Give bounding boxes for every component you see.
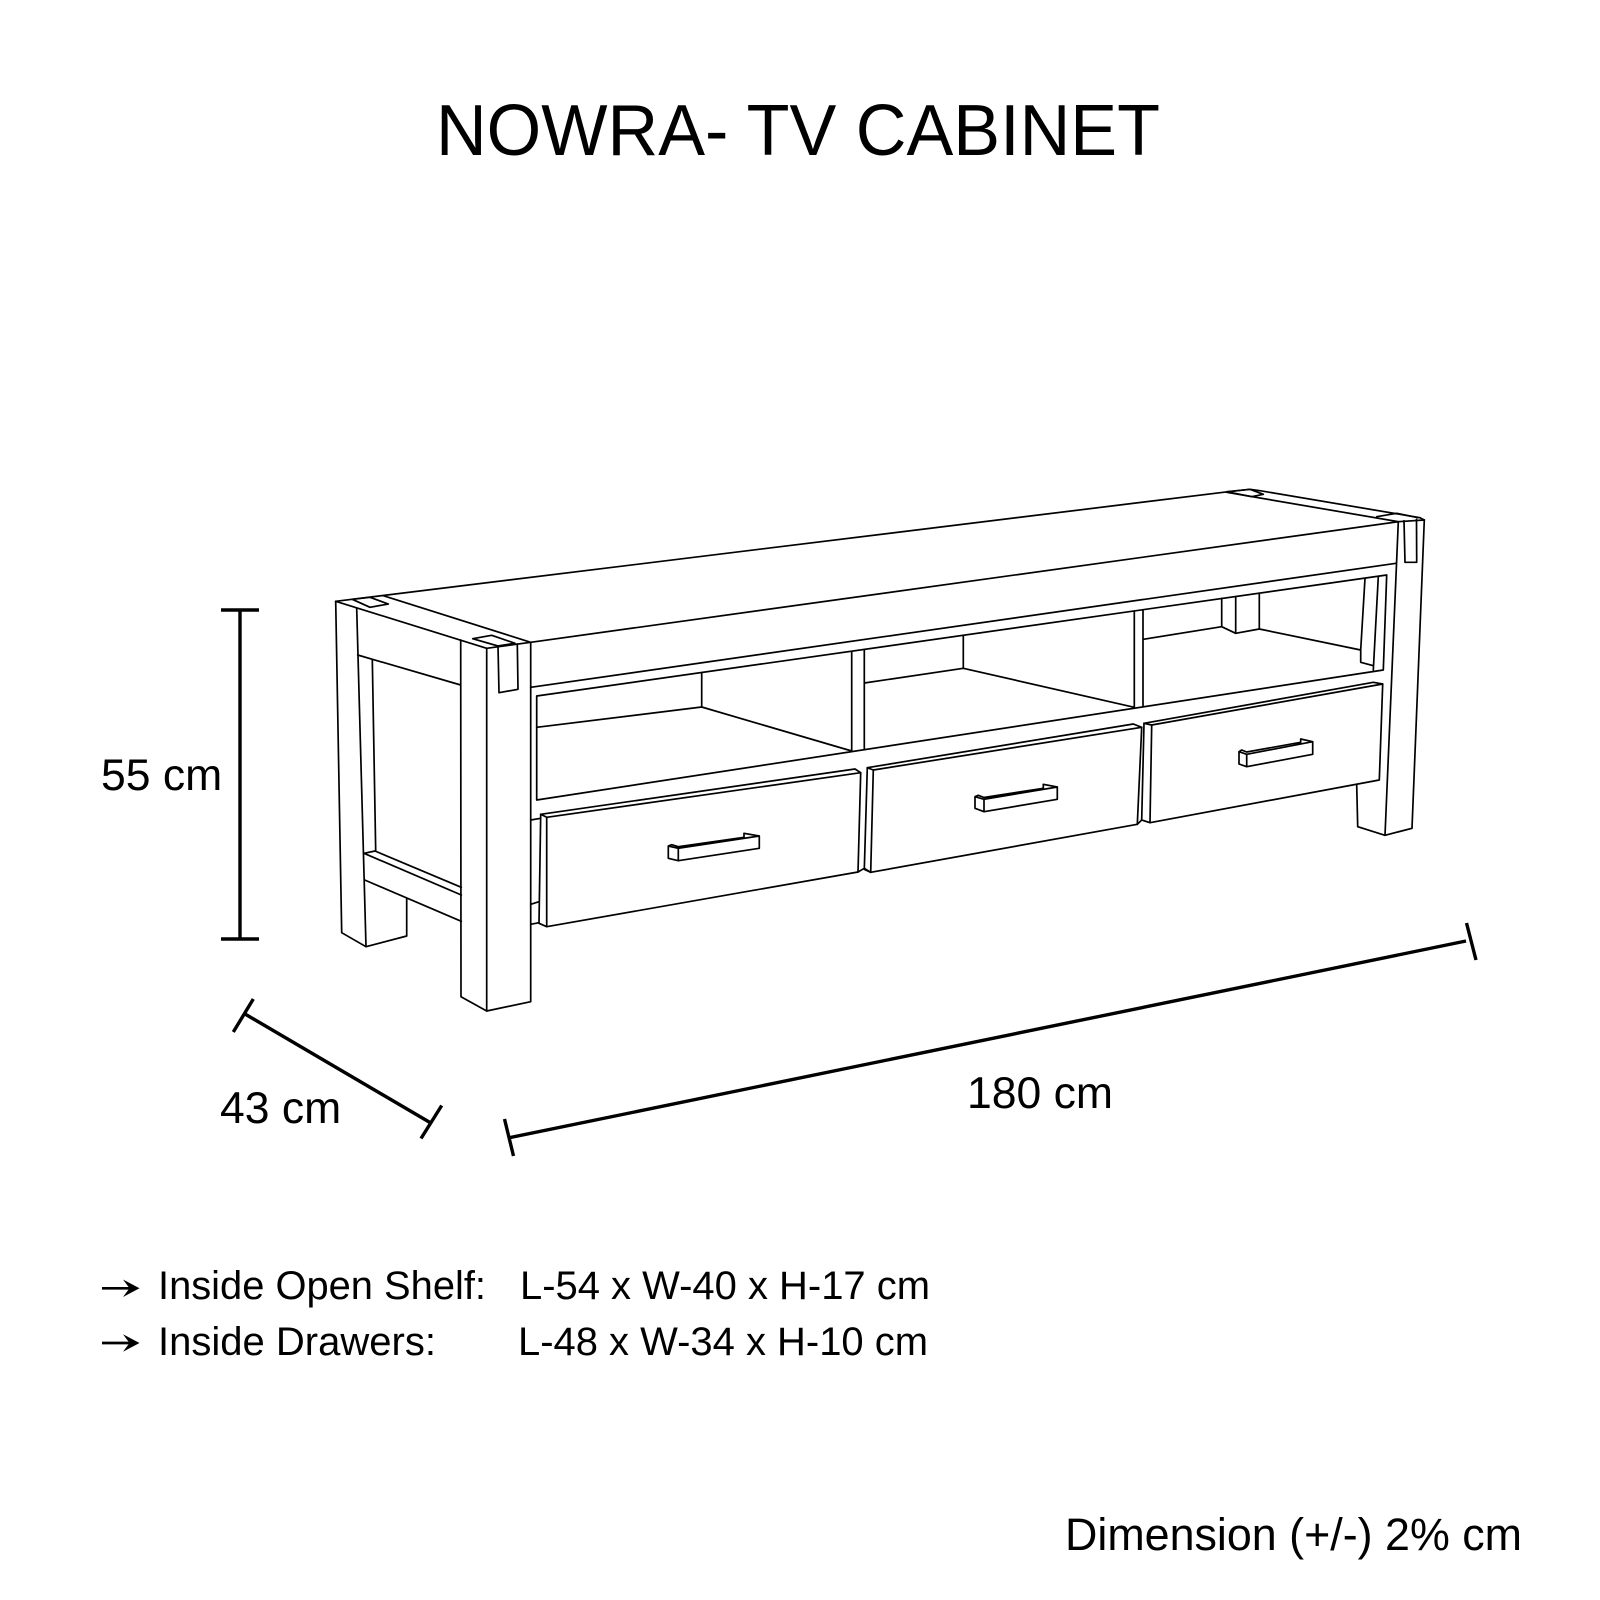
spec row: inside open shelf: Inside Open Shelf: <box>158 1264 486 1308</box>
front left leg <box>461 640 531 1011</box>
drawer 2 <box>858 724 1142 872</box>
drawer 3 handle <box>1239 739 1313 767</box>
spec row: inside open shelf: L-54 x W-40 x H-17 cm <box>520 1264 930 1308</box>
depth dimension line <box>233 999 442 1138</box>
tolerance note: Dimension (+/-) 2% cm <box>1065 1509 1522 1560</box>
height dimension line <box>221 610 259 939</box>
cabinet line drawing <box>336 489 1424 1011</box>
icon: arrow <box>102 1334 140 1352</box>
title: NOWRA- TV CABINET <box>436 91 1160 171</box>
spec row: inside open shelf <box>102 1264 930 1308</box>
shelf 1 <box>537 649 864 751</box>
label: 43 cm: 43 cm <box>220 1084 341 1133</box>
drawer 3 <box>1137 682 1383 824</box>
drawer 2 handle <box>975 784 1057 812</box>
drawer 1 handle <box>668 833 759 861</box>
label: 55 cm: 55 cm <box>101 751 222 800</box>
rear left leg and side frame <box>336 601 461 947</box>
drawer 1 <box>531 769 861 927</box>
spec row: inside drawers: Inside Drawers: <box>158 1320 436 1364</box>
width dimension line <box>504 923 1476 1156</box>
label: 180 cm: 180 cm <box>967 1069 1113 1118</box>
shelf 2 <box>864 611 1143 707</box>
shelf 3 <box>1143 577 1378 670</box>
top rail and shelf opening <box>531 563 1396 800</box>
icon: arrow <box>102 1280 140 1297</box>
spec row: inside drawers: L-48 x W-34 x H-10 cm <box>518 1320 928 1364</box>
spec row: inside drawers <box>102 1320 928 1364</box>
right leg <box>1357 519 1424 835</box>
tabletop <box>336 489 1424 648</box>
